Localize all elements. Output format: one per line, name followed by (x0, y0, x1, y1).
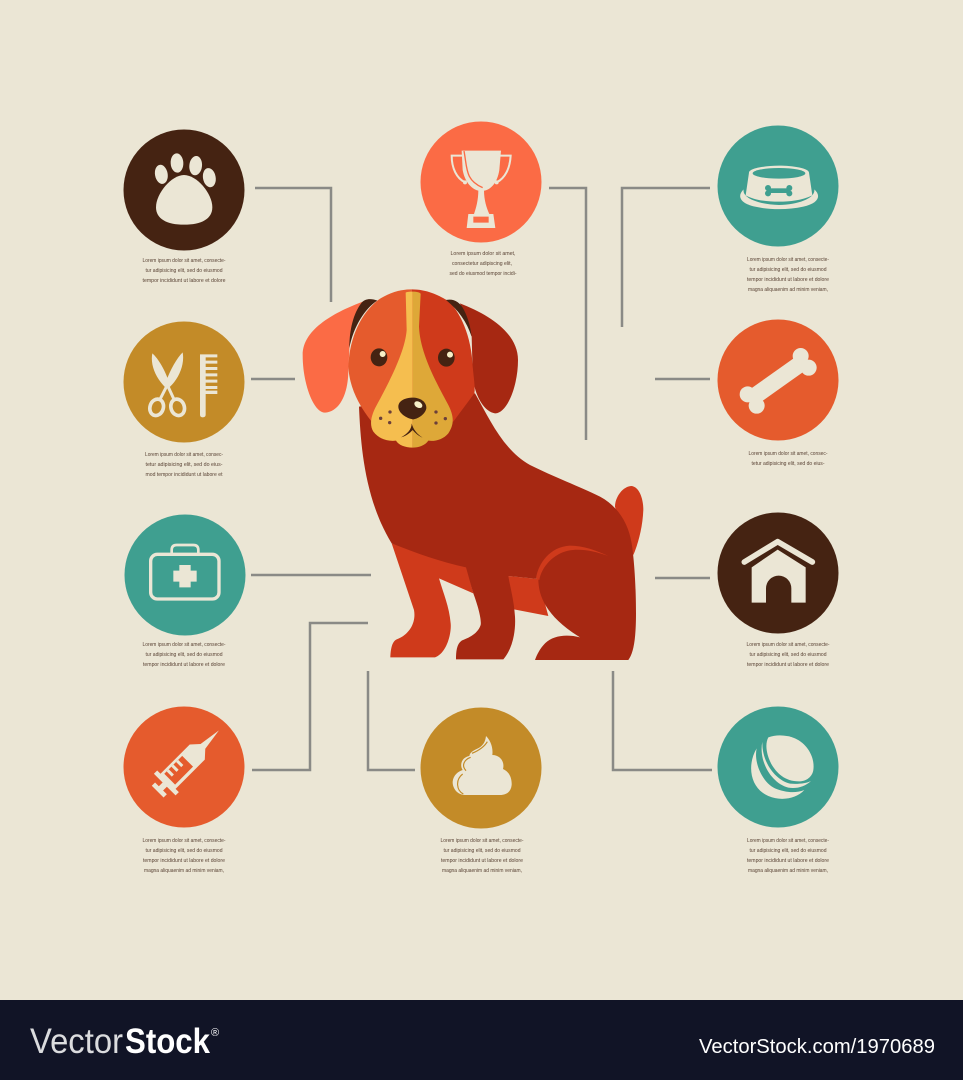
text: grooming caption: Lorem ipsum dolor sit amet, consec- (145, 452, 223, 458)
footer logo: Vector (30, 1022, 123, 1061)
text: waste caption: Lorem ipsum dolor sit amet, consecte- (440, 838, 524, 844)
icon: ball (718, 706, 838, 828)
text: food bowl caption: magna aliquaenim ad minim veniam, (748, 287, 828, 293)
text: trophy caption (450, 251, 517, 277)
text: ball caption (747, 838, 829, 874)
text: first aid caption: tempor incididunt ut labore et dolore (143, 662, 225, 668)
text: grooming caption: mod tempor incididunt ut labore et (146, 472, 223, 478)
text: ball caption: tempor incididunt ut labore et dolore (747, 858, 829, 864)
footer image id: VectorStock.com/1970689 (699, 1035, 935, 1058)
text: trophy caption: Lorem ipsum dolor sit amet, (450, 251, 516, 257)
icon: dog house (718, 512, 838, 634)
dog muzzle right (413, 292, 453, 448)
text: first aid caption (142, 642, 226, 668)
footer logo (30, 1022, 210, 1061)
panel: dog house (718, 512, 838, 668)
text: trophy caption: consectetur adipiscing elit, (452, 261, 512, 267)
text: trophy caption: sed do eiusmod tempor incidi- (450, 271, 517, 277)
text: vaccination caption: tur adipisicing elit, sed do eiusmod (146, 848, 223, 854)
icon: bowl (718, 126, 838, 246)
text: bone caption: tetur adipisicing elit, sed do eius- (752, 461, 825, 467)
text: grooming caption: tetur adipisicing elit, sed do eius- (146, 462, 223, 468)
panel: grooming (124, 322, 244, 478)
dog ear patch left (349, 299, 377, 348)
text: waste caption (440, 838, 524, 874)
text: ball caption: Lorem ipsum dolor sit amet, consecte- (747, 838, 829, 844)
panel: food bowl (718, 126, 838, 293)
icon: bone (718, 320, 838, 440)
panel: bone (718, 320, 838, 467)
dog hip highlight (536, 546, 608, 580)
footer bar (0, 1000, 963, 1080)
text: dog house caption: tempor incididunt ut labore et dolore (747, 662, 829, 668)
dog head left (348, 289, 412, 422)
text: first aid caption: Lorem ipsum dolor sit amet, consecte- (142, 642, 226, 648)
icon: scissors and comb (124, 322, 244, 442)
text: vaccination caption: tempor incididunt ut labore et dolore (143, 858, 225, 864)
panel: paw (124, 130, 244, 284)
text: food bowl caption: Lorem ipsum dolor sit amet, consecte- (747, 257, 829, 263)
footer registered mark: ® (211, 1027, 219, 1039)
text: food bowl caption (747, 257, 829, 293)
text: dog house caption (746, 642, 830, 668)
dog nose (398, 398, 426, 419)
text: ball caption: magna aliquaenim ad minim veniam, (748, 868, 828, 874)
panel: first aid (124, 514, 246, 668)
text: dog house caption: tur adipisicing elit, sed do eiusmod (750, 652, 827, 658)
text: ball caption: tur adipisicing elit, sed do eiusmod (750, 848, 827, 854)
text: paw caption: Lorem ipsum dolor sit amet, consecte- (142, 258, 226, 264)
text: paw caption: tur adipisicing elit, sed do eiusmod (146, 268, 223, 274)
text: food bowl caption: tur adipisicing elit, sed do eiusmod (750, 267, 827, 273)
icon: poop (420, 708, 542, 828)
dog freckles (379, 410, 447, 425)
text: bone caption (748, 451, 828, 467)
text: first aid caption: tur adipisicing elit, sed do eiusmod (146, 652, 223, 658)
text: dog house caption: Lorem ipsum dolor sit amet, consecte- (746, 642, 830, 648)
dog eyes (371, 348, 455, 367)
dog right ear (460, 303, 518, 413)
text: vaccination caption: magna aliquaenim ad minim veniam, (144, 868, 224, 874)
dog tail (615, 486, 643, 555)
text: waste caption: tempor incididunt ut labore et dolore (441, 858, 523, 864)
dog mouth (401, 423, 423, 438)
panel: vaccination (124, 706, 244, 874)
panel: ball (718, 706, 838, 874)
text: grooming caption (145, 452, 223, 478)
text: bone caption: Lorem ipsum dolor sit amet, consec- (748, 451, 828, 457)
panel: waste (420, 708, 542, 874)
text: paw caption (142, 258, 226, 284)
illustration: dog (303, 289, 643, 660)
icon: syringe (124, 706, 244, 828)
text: food bowl caption: tempor incididunt ut labore et dolore (747, 277, 829, 283)
panel: trophy (420, 122, 542, 277)
dog left ear (303, 302, 363, 413)
text: waste caption: tur adipisicing elit, sed do eiusmod (444, 848, 521, 854)
text: vaccination caption (142, 838, 226, 874)
text: waste caption: magna aliquaenim ad minim veniam, (442, 868, 522, 874)
dog ear patch right (446, 300, 472, 337)
icon: paw (124, 130, 244, 250)
dog head right (412, 289, 475, 422)
icon: first aid kit (124, 514, 246, 636)
dog far legs (390, 543, 548, 657)
text: vaccination caption: Lorem ipsum dolor sit amet, consecte- (142, 838, 226, 844)
text: paw caption: tempor incididunt ut labore et dolore (142, 278, 226, 284)
icon: trophy (420, 122, 542, 242)
footer logo: Stock (125, 1022, 210, 1061)
dog body (359, 393, 636, 660)
dog muzzle left (371, 292, 413, 448)
